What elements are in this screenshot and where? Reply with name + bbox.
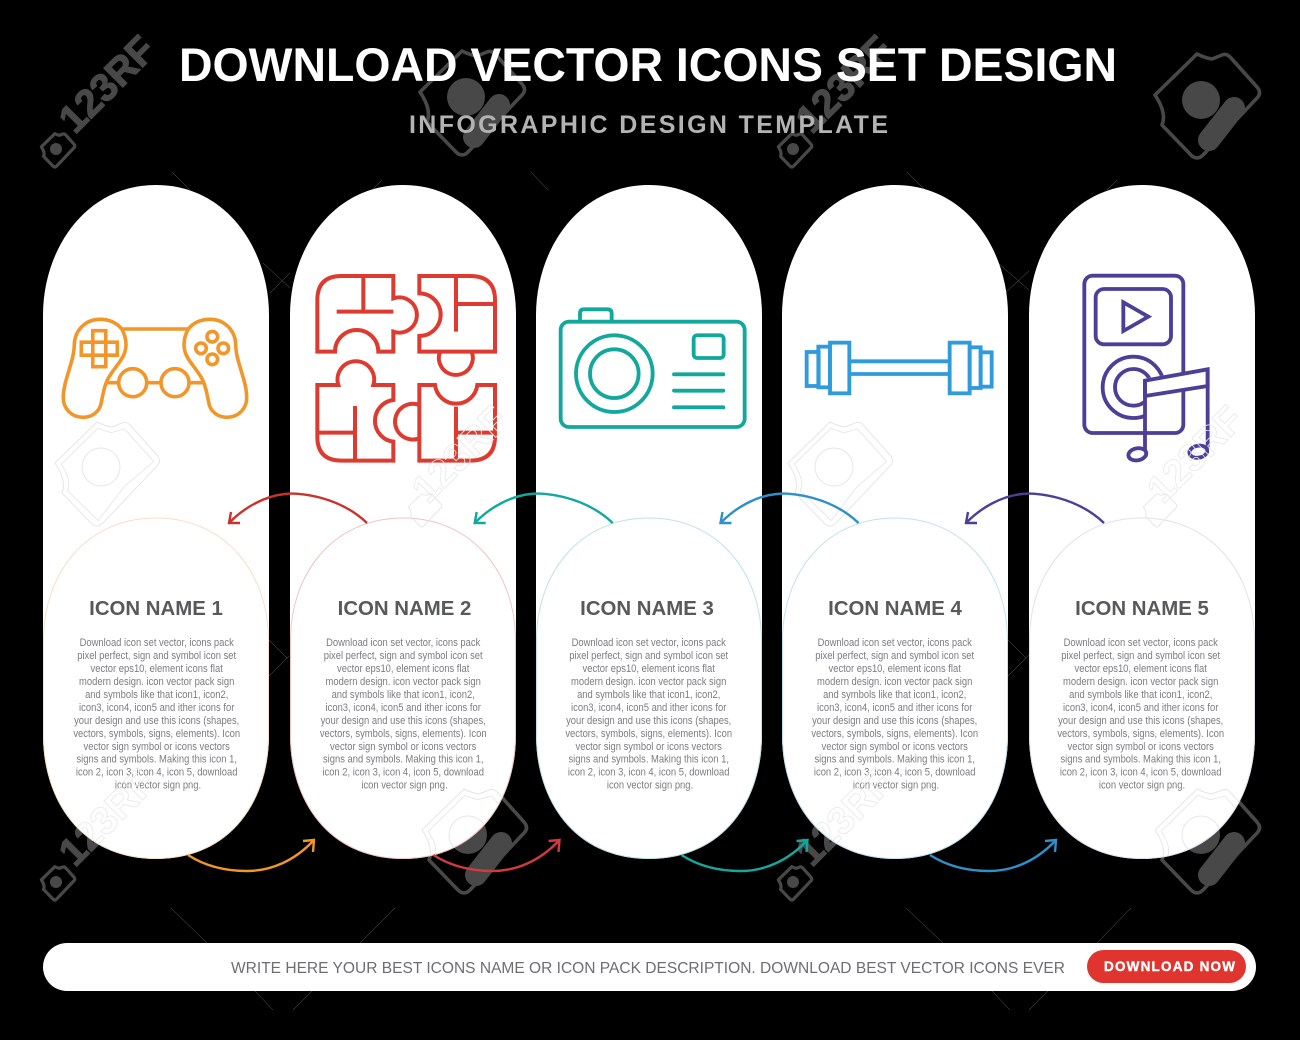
body text 3: icon 2, icon 3, icon 4, icon 5, download bbox=[568, 767, 729, 779]
body text 2: icon3, icon4, icon5 and ither icons for bbox=[326, 703, 481, 714]
faint watermarks over white pills: 123RF bbox=[788, 761, 901, 874]
body text 2: icon 2, icon 3, icon 4, icon 5, download bbox=[322, 767, 484, 779]
body text 3: modern design. icon vector pack sign bbox=[571, 677, 726, 688]
body text 1: vectors, symbols, signs, elements). Icon bbox=[73, 729, 240, 740]
body text 5: modern design. icon vector pack sign bbox=[1063, 677, 1218, 688]
pill background 3 bbox=[536, 185, 762, 859]
faint watermarks over white pills: 123RF bbox=[51, 761, 164, 874]
watermarks on black background: 123RF bbox=[1139, 398, 1252, 511]
body text 3: vector eps10, element icons flat bbox=[583, 664, 715, 675]
panel 5: music player bbox=[1029, 185, 1255, 859]
icon: barbell bbox=[807, 343, 992, 393]
body text 3: and symbols like that icon1, icon2, bbox=[577, 690, 720, 701]
body text 4: and symbols like that icon1, icon2, bbox=[823, 690, 966, 701]
inner outline 3 bbox=[536, 518, 762, 858]
arrow: orange bottom bbox=[188, 840, 314, 871]
arrow: purple top bbox=[966, 494, 1104, 523]
faint watermarks over white pills: 123RF bbox=[404, 398, 517, 511]
faint watermarks over white pills: 123RF bbox=[1139, 398, 1252, 511]
watermarks on black background: 123RF bbox=[51, 28, 164, 141]
panel 1: game controller bbox=[43, 185, 269, 859]
body text 2: your design and use this icons (shapes, bbox=[321, 716, 486, 727]
heading 5: ICON NAME 5 bbox=[1075, 598, 1209, 620]
icon: camera bbox=[561, 309, 745, 427]
body text 4: icon vector sign png. bbox=[853, 780, 939, 792]
body text 4: icon 2, icon 3, icon 4, icon 5, download bbox=[814, 767, 975, 779]
panel 2: puzzle bbox=[290, 185, 516, 859]
inner outline 4 bbox=[782, 518, 1008, 858]
body text 1: icon 2, icon 3, icon 4, icon 5, download bbox=[76, 767, 237, 779]
body text 5: Download icon set vector, icons pack bbox=[1064, 638, 1219, 649]
body text 3: signs and symbols. Making this icon 1, bbox=[568, 754, 729, 766]
body text 4: modern design. icon vector pack sign bbox=[817, 677, 972, 688]
body text 1: Download icon set vector, icons pack bbox=[80, 638, 235, 649]
body text 5: icon vector sign png. bbox=[1099, 780, 1185, 792]
bottom banner bbox=[43, 943, 1256, 991]
panel 3: camera bbox=[536, 185, 762, 859]
body text 1: modern design. icon vector pack sign bbox=[79, 677, 234, 688]
body text 5: vectors, symbols, signs, elements). Icon bbox=[1057, 729, 1224, 740]
body text 5: vector sign symbol or icons vectors bbox=[1068, 742, 1214, 753]
arrow: blue bottom bbox=[930, 840, 1056, 871]
pill background 2 bbox=[290, 185, 516, 859]
body text 3: your design and use this icons (shapes, bbox=[566, 716, 731, 727]
body text 2: signs and symbols. Making this icon 1, bbox=[323, 754, 483, 766]
body text 1: signs and symbols. Making this icon 1, bbox=[76, 754, 237, 766]
arrow: blue top bbox=[720, 494, 858, 523]
body text 4: pixel perfect, sign and symbol icon set bbox=[815, 651, 974, 662]
download button bbox=[1087, 950, 1246, 983]
watermarks on black background: 123RF bbox=[51, 761, 164, 874]
body text 2: icon vector sign png. bbox=[361, 780, 448, 792]
body text 1: icon vector sign png. bbox=[115, 780, 201, 792]
watermarks on black background: 123RF bbox=[788, 761, 901, 874]
inner outline 5 bbox=[1030, 518, 1254, 858]
body text 4: your design and use this icons (shapes, bbox=[812, 716, 977, 727]
body text 4: Download icon set vector, icons pack bbox=[818, 638, 973, 649]
body text 2: vector sign symbol or icons vectors bbox=[330, 742, 476, 753]
body text 2: modern design. icon vector pack sign bbox=[326, 677, 481, 688]
subtitle: INFOGRAPHIC DESIGN TEMPLATE bbox=[409, 111, 888, 139]
body text 3: icon vector sign png. bbox=[607, 780, 693, 792]
body text 5: signs and symbols. Making this icon 1, bbox=[1060, 754, 1221, 766]
banner background bbox=[43, 943, 1256, 991]
body text 5: icon 2, icon 3, icon 4, icon 5, download bbox=[1060, 767, 1221, 779]
download button: DOWNLOAD NOW bbox=[1104, 959, 1235, 974]
watermarks on black background bbox=[41, 28, 1260, 900]
arrow: red bottom bbox=[434, 840, 560, 871]
body text 1: vector sign symbol or icons vectors bbox=[84, 742, 230, 753]
heading 4: ICON NAME 4 bbox=[828, 598, 963, 620]
body text 1: pixel perfect, sign and symbol icon set bbox=[77, 651, 236, 662]
body text 3: pixel perfect, sign and symbol icon set bbox=[569, 651, 728, 662]
body text 4: vector sign symbol or icons vectors bbox=[822, 742, 968, 753]
faint watermarks over white pills bbox=[51, 398, 1259, 893]
arrow: teal bottom bbox=[682, 840, 808, 871]
body text 2: pixel perfect, sign and symbol icon set bbox=[324, 651, 483, 662]
icon: puzzle bbox=[317, 276, 495, 461]
body text 5: vector eps10, element icons flat bbox=[1075, 664, 1207, 675]
watermarks on black background: 123RF bbox=[788, 28, 901, 141]
banner description text: WRITE HERE YOUR BEST ICONS NAME OR ICON PACK DESCRIPTION. DOWNLOAD BEST VECTOR ICONS EVER bbox=[231, 960, 1065, 977]
pill background 5 bbox=[1029, 185, 1255, 859]
watermarks on black background: 123RF bbox=[404, 398, 517, 511]
body text 2: and symbols like that icon1, icon2, bbox=[332, 690, 475, 701]
heading 1: ICON NAME 1 bbox=[89, 598, 223, 620]
arrow: red top bbox=[229, 494, 367, 523]
body text 2: Download icon set vector, icons pack bbox=[326, 638, 481, 649]
body text 4: icon3, icon4, icon5 and ither icons for bbox=[817, 703, 973, 714]
body text 3: icon3, icon4, icon5 and ither icons for bbox=[571, 703, 727, 714]
body text 2: vectors, symbols, signs, elements). Icon bbox=[320, 729, 487, 740]
body text 4: vectors, symbols, signs, elements). Icon bbox=[811, 729, 978, 740]
body text 5: pixel perfect, sign and symbol icon set bbox=[1061, 651, 1220, 662]
pill background 4 bbox=[782, 185, 1008, 859]
body text 4: vector eps10, element icons flat bbox=[829, 664, 961, 675]
icon: game controller bbox=[63, 319, 247, 417]
inner outline 1 bbox=[44, 518, 268, 858]
title: DOWNLOAD VECTOR ICONS SET DESIGN bbox=[179, 38, 1117, 91]
heading 2: ICON NAME 2 bbox=[338, 598, 471, 620]
body text 3: vectors, symbols, signs, elements). Icon bbox=[565, 729, 732, 740]
inner outline 2 bbox=[290, 518, 516, 858]
body text 1: vector eps10, element icons flat bbox=[91, 664, 223, 675]
body text 1: icon3, icon4, icon5 and ither icons for bbox=[79, 703, 235, 714]
panel 4: barbell bbox=[782, 185, 1008, 859]
pill background 1 bbox=[43, 185, 269, 859]
body text 5: icon3, icon4, icon5 and ither icons for bbox=[1063, 703, 1219, 714]
body text 2: vector eps10, element icons flat bbox=[337, 664, 470, 675]
body text 4: signs and symbols. Making this icon 1, bbox=[814, 754, 975, 766]
body text 3: vector sign symbol or icons vectors bbox=[576, 742, 722, 753]
body text 3: Download icon set vector, icons pack bbox=[572, 638, 727, 649]
body text 1: your design and use this icons (shapes, bbox=[74, 716, 239, 727]
body text 5: and symbols like that icon1, icon2, bbox=[1069, 690, 1212, 701]
body text 5: your design and use this icons (shapes, bbox=[1058, 716, 1223, 727]
heading 3: ICON NAME 3 bbox=[580, 598, 714, 620]
icon: music player bbox=[1084, 276, 1210, 462]
body text 1: and symbols like that icon1, icon2, bbox=[85, 690, 228, 701]
arrow: teal top bbox=[475, 494, 613, 523]
